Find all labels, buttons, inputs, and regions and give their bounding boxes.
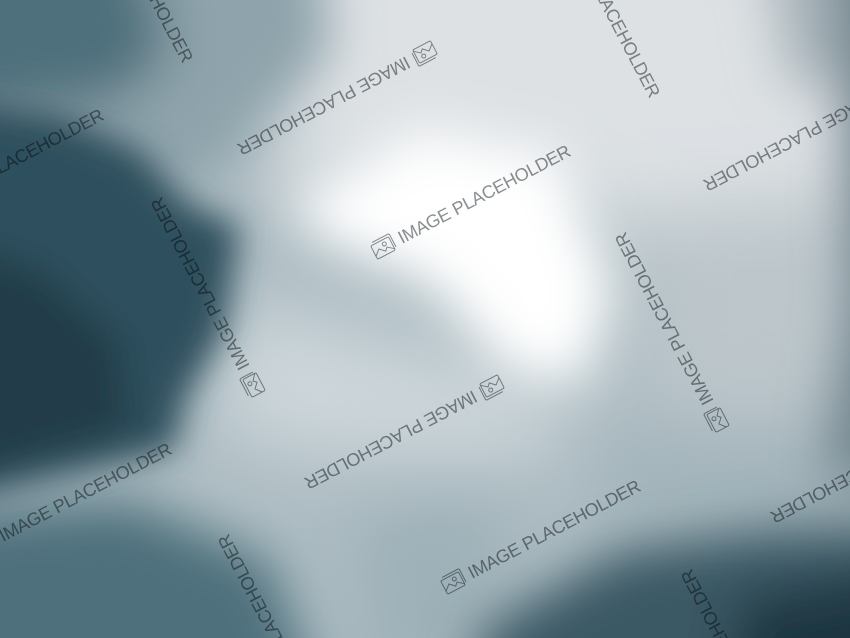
watermark: left steep: IMAGE PLACEHOLDER [147, 194, 254, 373]
watermark: lower left: IMAGE PLACEHOLDER [0, 439, 175, 546]
watermark: center: IMAGE PLACEHOLDER [395, 141, 574, 248]
watermark: upper inverted: IMAGE PLACEHOLDER [234, 52, 413, 159]
watermark: right steep: IMAGE PLACEHOLDER [611, 229, 718, 408]
watermark: bottom center: IMAGE PLACEHOLDER [465, 476, 644, 583]
watermark: lower inverted: IMAGE PLACEHOLDER [301, 386, 480, 493]
